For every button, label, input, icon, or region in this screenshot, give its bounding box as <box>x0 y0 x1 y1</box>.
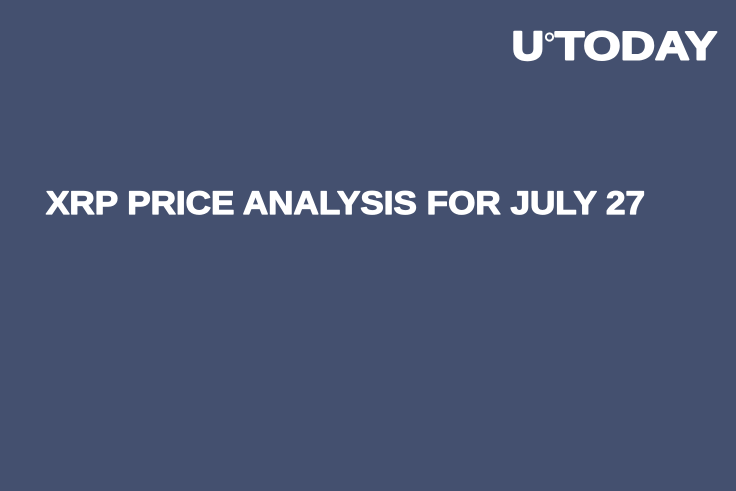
logo letter U: U <box>512 23 544 68</box>
logo word TODAY: TODAY <box>555 24 717 68</box>
logo: U.Today <box>512 23 717 68</box>
title: XRP PRICE ANALYSIS FOR JULY 27 <box>46 185 645 221</box>
logo degree mark <box>546 33 553 41</box>
